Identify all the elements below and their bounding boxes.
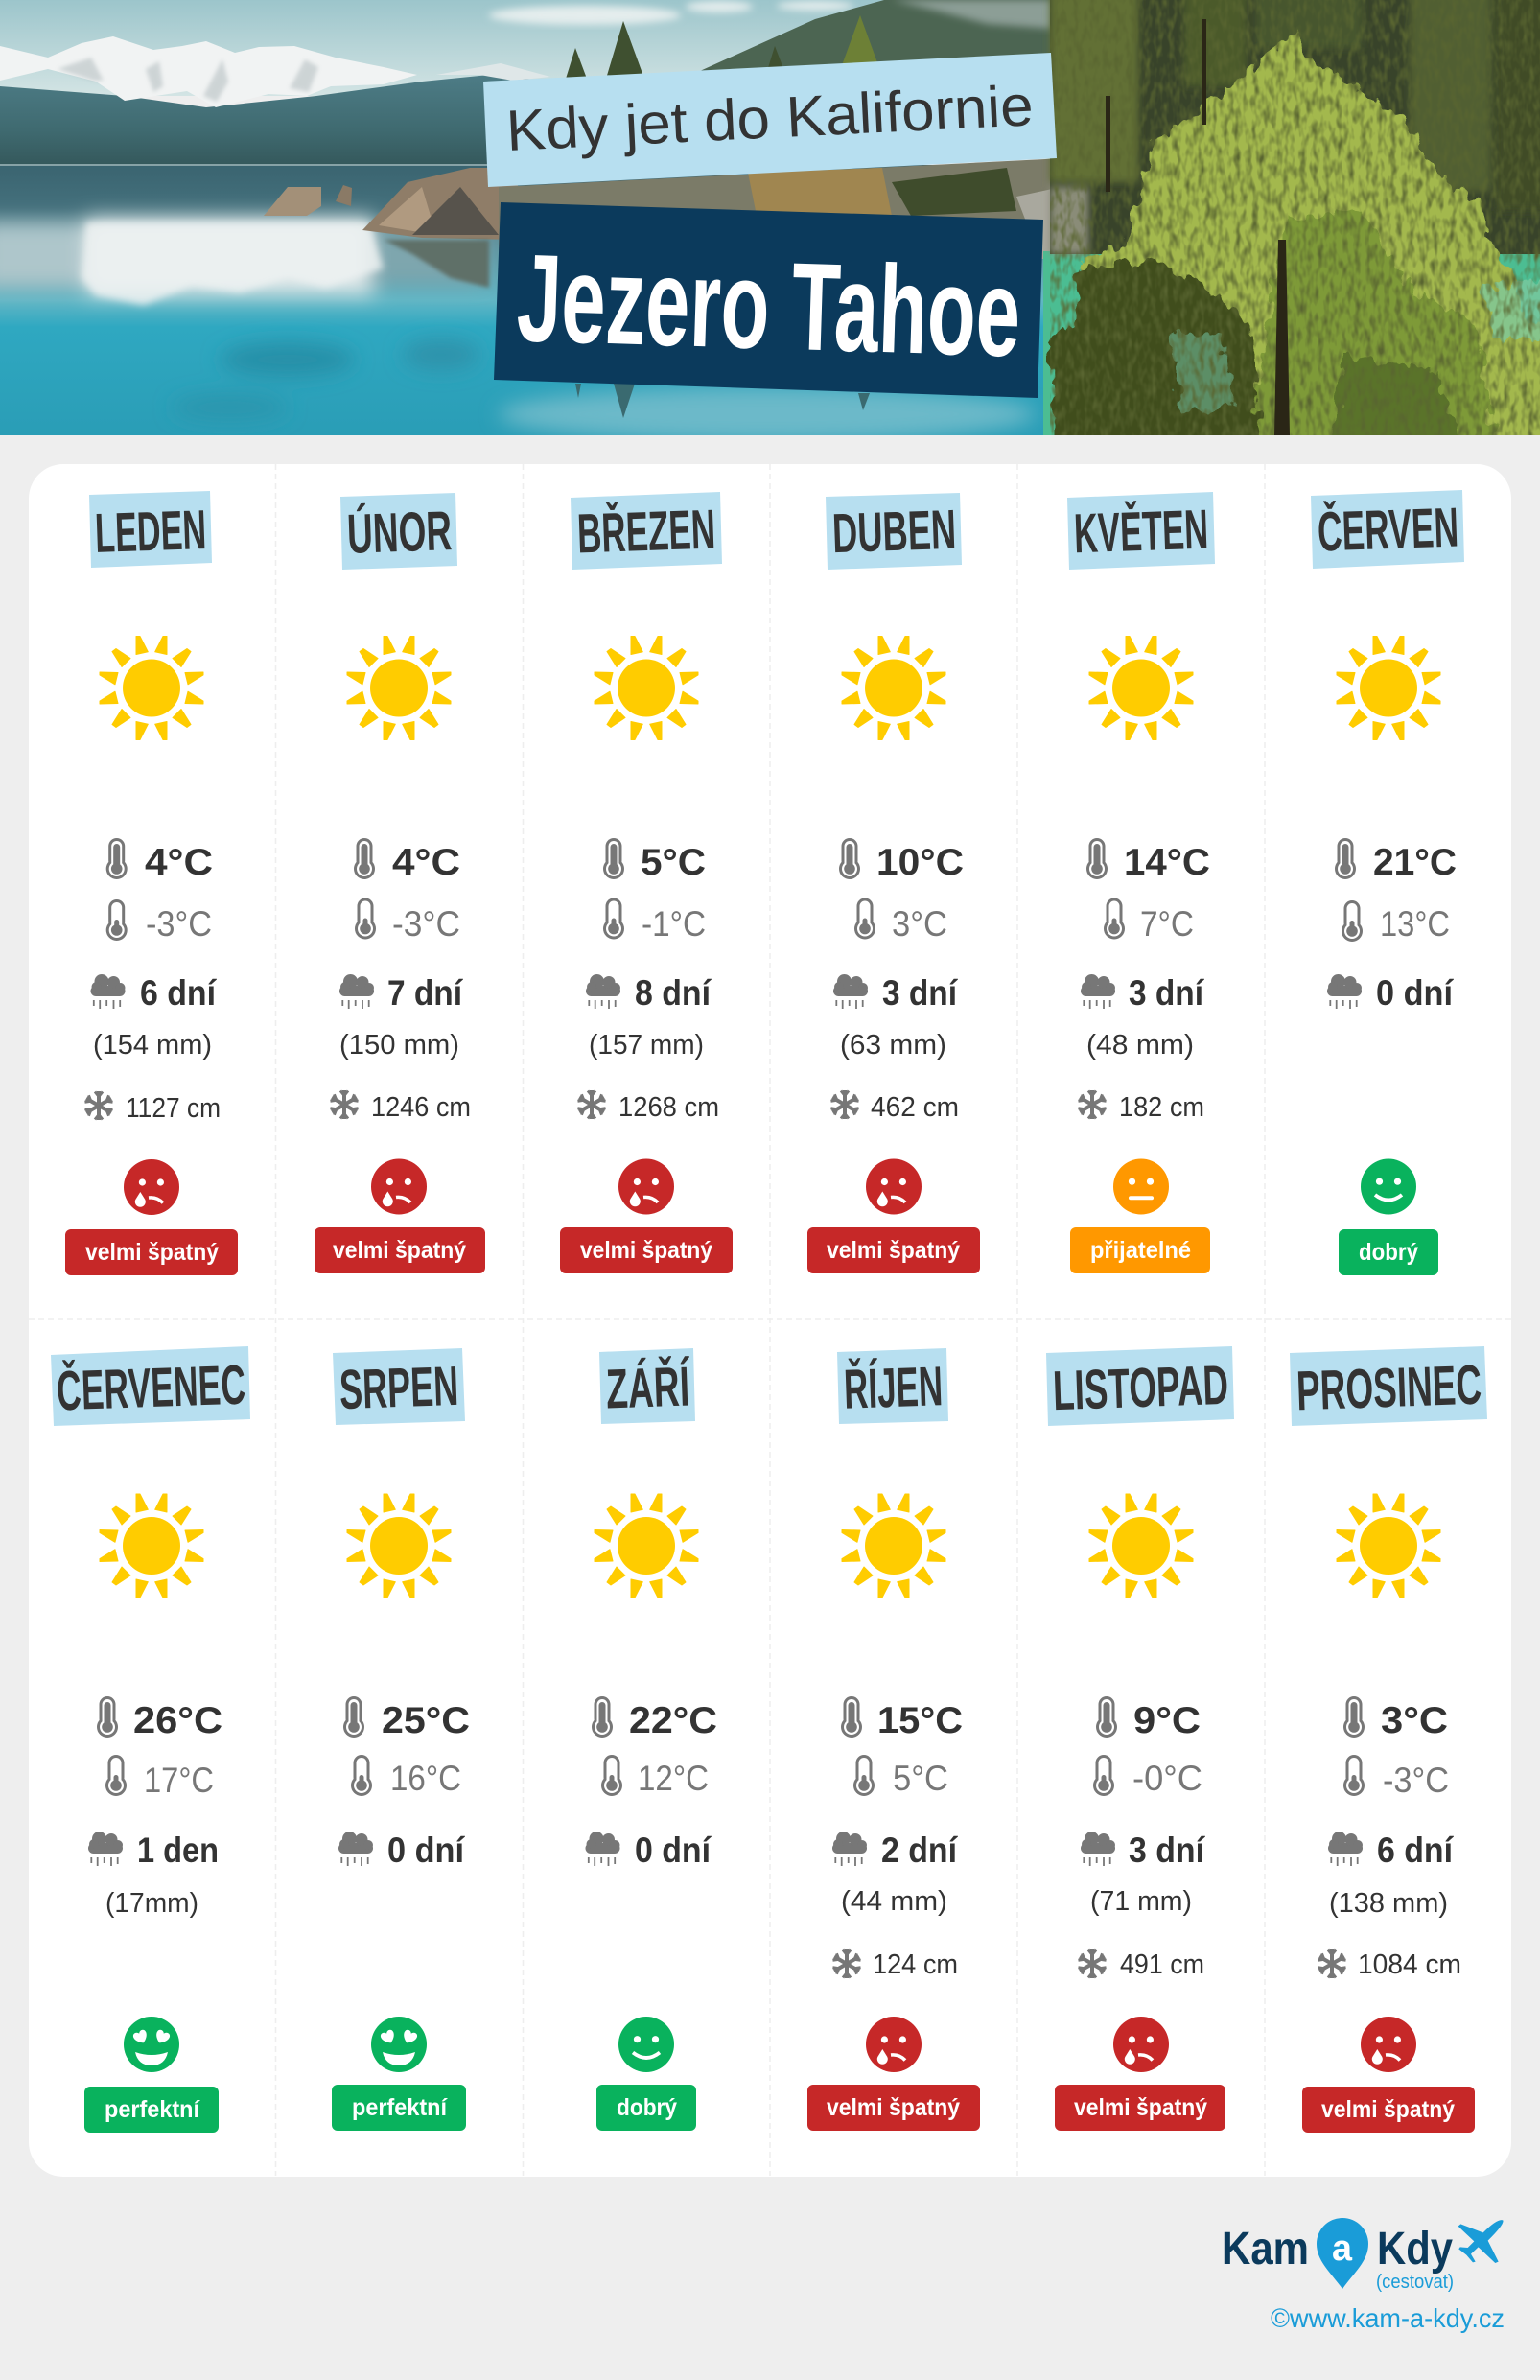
month label xyxy=(340,493,457,570)
icon: sun xyxy=(842,637,945,740)
rain days xyxy=(1081,973,1205,1013)
icon: sun xyxy=(347,1494,451,1598)
rainfall: (138 mm) xyxy=(1329,1888,1448,1919)
month: ČERVEN xyxy=(1311,490,1464,1275)
month label: LEDEN xyxy=(94,499,207,565)
month: SRPEN xyxy=(332,1348,470,2131)
snowfall xyxy=(1078,1949,1204,1980)
month label xyxy=(826,493,962,570)
shoreline strip xyxy=(0,164,489,166)
rating badge xyxy=(65,1229,238,1275)
min temperature xyxy=(603,898,706,944)
snowfall: 1084 cm xyxy=(1358,1949,1461,1980)
rain days: 0 dní xyxy=(635,1831,712,1870)
month label xyxy=(599,1348,695,1424)
snowfall: 462 cm xyxy=(871,1092,959,1123)
rating badge xyxy=(1302,2087,1475,2133)
snowfall xyxy=(330,1090,471,1123)
rain days xyxy=(88,1831,219,1870)
max temperature xyxy=(97,1696,222,1741)
icon: sun xyxy=(1089,1494,1193,1598)
month label: BŘEZEN xyxy=(576,499,716,565)
snowfall: 1127 cm xyxy=(126,1093,221,1124)
rating badge xyxy=(84,2087,219,2133)
min temperature: 5°C xyxy=(893,1759,948,1798)
rain days: 6 dní xyxy=(1377,1831,1455,1870)
icon: crying face xyxy=(618,1158,674,1214)
dark forested mountains xyxy=(0,75,529,164)
month: PROSINEC xyxy=(1290,1346,1487,2133)
icon: crying face xyxy=(1113,2017,1169,2072)
month label xyxy=(89,491,212,568)
min temperature xyxy=(105,1755,214,1800)
rating badge xyxy=(596,2085,696,2131)
snowfall xyxy=(84,1091,221,1124)
max temperature xyxy=(354,838,460,883)
icon: sun xyxy=(100,1494,203,1598)
min temperature xyxy=(854,898,947,944)
rainfall: (63 mm) xyxy=(840,1030,946,1061)
month label: ZÁŘÍ xyxy=(605,1355,691,1420)
month label: ŘÍJEN xyxy=(843,1355,944,1421)
min temperature: -0°C xyxy=(1132,1759,1202,1798)
rain days xyxy=(1327,973,1455,1013)
rating badge xyxy=(1070,1227,1210,1273)
rain days: 2 dní xyxy=(881,1831,959,1870)
foliage group xyxy=(1050,31,1540,451)
rating badge: velmi špatný xyxy=(85,1239,219,1266)
min temperature: 12°C xyxy=(638,1759,709,1798)
month label: SRPEN xyxy=(338,1355,459,1421)
rating badge: velmi špatný xyxy=(1321,2096,1455,2123)
month label xyxy=(571,492,722,570)
rain days: 1 den xyxy=(137,1831,219,1870)
max temperature: 4°C xyxy=(392,842,460,883)
lighter shallow water xyxy=(173,339,1036,441)
snowfall xyxy=(830,1090,959,1123)
rain days xyxy=(90,973,218,1013)
far right mountain xyxy=(701,0,1050,71)
rating badge: velmi špatný xyxy=(827,2094,960,2121)
min temperature xyxy=(106,899,212,944)
rating badge xyxy=(1055,2085,1225,2131)
rainfall: (71 mm) xyxy=(1090,1886,1192,1917)
min temperature xyxy=(853,1755,948,1798)
min temperature xyxy=(601,1755,709,1798)
logo word: Kdy: Kdy xyxy=(1377,2224,1453,2275)
min temperature xyxy=(355,898,460,944)
min temperature: -3°C xyxy=(1383,1761,1449,1800)
rainfall: (154 mm) xyxy=(93,1030,212,1061)
min temperature xyxy=(1342,900,1450,944)
month label xyxy=(1067,492,1215,570)
snowy peaks xyxy=(0,36,417,107)
rain days: 7 dní xyxy=(387,973,464,1013)
icon: map pin xyxy=(1317,2218,1368,2289)
max temperature xyxy=(106,838,213,883)
rain days: 0 dní xyxy=(387,1831,466,1870)
rain days: 3 dní xyxy=(1129,1831,1206,1870)
max temperature: 9°C xyxy=(1133,1700,1201,1741)
rating badge: přijatelné xyxy=(1090,1237,1191,1264)
rainfall: (44 mm) xyxy=(841,1886,947,1917)
emerald shallows xyxy=(1043,251,1540,435)
rain days: 6 dní xyxy=(140,973,218,1013)
min temperature: 16°C xyxy=(390,1759,461,1798)
max temperature xyxy=(1335,838,1457,883)
month label: LISTOPAD xyxy=(1052,1354,1229,1422)
max temperature xyxy=(841,1696,963,1741)
max temperature: 22°C xyxy=(629,1700,717,1741)
min temperature: 13°C xyxy=(1380,904,1450,944)
max temperature xyxy=(839,838,964,883)
max temperature: 4°C xyxy=(145,842,213,883)
icon: sun xyxy=(347,637,451,740)
min temperature: -3°C xyxy=(146,904,212,944)
icon: heart-eyes face xyxy=(124,2017,179,2072)
sky xyxy=(0,0,884,96)
month label: ČERVENEC xyxy=(56,1354,246,1422)
max temperature xyxy=(592,1696,717,1741)
website link: ©www.kam-a-kdy.cz xyxy=(1271,2303,1505,2333)
month: BŘEZEN xyxy=(560,492,733,1273)
icon: crying face xyxy=(1361,2017,1416,2072)
icon: map pin: a xyxy=(1332,2228,1353,2269)
icon: crying face xyxy=(124,1159,179,1215)
min temperature xyxy=(351,1755,461,1798)
rating badge: perfektní xyxy=(352,2094,448,2121)
max temperature: 25°C xyxy=(382,1700,470,1741)
title banner xyxy=(494,202,1043,398)
rating badge xyxy=(332,2085,466,2131)
rating badge: velmi špatný xyxy=(333,1237,466,1264)
rating badge: dobrý xyxy=(1359,1239,1418,1266)
rating badge: dobrý xyxy=(617,2094,677,2121)
month label: KVĚTEN xyxy=(1073,499,1209,565)
hero photo: lake with mountains and pines xyxy=(0,0,1540,451)
min temperature: 7°C xyxy=(1140,904,1194,944)
icon: sun xyxy=(595,1494,698,1598)
title text: Jezero Tahoe xyxy=(515,227,1022,383)
month: ÚNOR xyxy=(315,493,485,1273)
max temperature xyxy=(1096,1696,1201,1741)
snowfall xyxy=(577,1090,719,1123)
icon: heart-eyes face xyxy=(371,2017,427,2072)
icon: neutral face xyxy=(1113,1158,1169,1214)
icon: smiling face xyxy=(1361,1158,1416,1214)
icon: sun xyxy=(100,637,203,740)
month label xyxy=(837,1348,948,1424)
max temperature xyxy=(1086,838,1210,883)
max temperature xyxy=(343,1696,470,1741)
month label xyxy=(51,1346,250,1426)
white calendar card xyxy=(29,464,1511,2177)
rain days xyxy=(833,973,959,1013)
rainfall: (157 mm) xyxy=(589,1030,704,1061)
max temperature xyxy=(603,838,706,883)
rating badge xyxy=(315,1227,485,1273)
month label xyxy=(1046,1346,1234,1426)
snowfall: 1246 cm xyxy=(371,1092,471,1123)
month label xyxy=(1311,490,1464,569)
rating badge: perfektní xyxy=(105,2096,200,2123)
min temperature xyxy=(1343,1755,1449,1800)
max temperature: 14°C xyxy=(1124,842,1210,883)
needle texture xyxy=(1050,0,1540,435)
month: LEDEN xyxy=(65,491,238,1275)
min temperature xyxy=(1093,1755,1202,1798)
rain days xyxy=(586,973,712,1013)
rainfall: (48 mm) xyxy=(1086,1030,1194,1061)
rating badge: velmi špatný xyxy=(1074,2094,1207,2121)
rating badge xyxy=(807,2085,980,2131)
clouds xyxy=(489,1,853,25)
rain days xyxy=(832,1831,959,1870)
rain days xyxy=(1328,1831,1455,1870)
rating badge: velmi špatný xyxy=(580,1237,712,1264)
reflection streaks xyxy=(82,222,384,305)
snowfall: 491 cm xyxy=(1120,1949,1204,1980)
min temperature xyxy=(1104,898,1194,944)
rain days: 3 dní xyxy=(1129,973,1205,1013)
icon: sun xyxy=(595,637,698,740)
rain days xyxy=(585,1831,712,1870)
subtitle banner xyxy=(483,53,1057,187)
rating badge xyxy=(560,1227,733,1273)
max temperature: 21°C xyxy=(1373,842,1457,883)
min temperature: -1°C xyxy=(642,904,706,944)
rain days xyxy=(338,1831,466,1870)
month label: ÚNOR xyxy=(346,500,453,566)
month: LISTOPAD xyxy=(1046,1346,1234,2131)
logo tagline: (cestovat) xyxy=(1376,2272,1454,2293)
rain days xyxy=(1081,1831,1206,1870)
month: ČERVENEC xyxy=(51,1346,250,2133)
month label xyxy=(333,1348,465,1425)
mountain reflection xyxy=(0,217,484,295)
min temperature: 3°C xyxy=(892,904,947,944)
max temperature: 3°C xyxy=(1381,1700,1448,1741)
rain days: 8 dní xyxy=(635,973,712,1013)
snowfall xyxy=(1078,1090,1204,1123)
grid dividers xyxy=(29,464,1511,2176)
logo word: Kam: Kam xyxy=(1222,2224,1309,2275)
small conifers xyxy=(566,21,784,79)
icon: crying face xyxy=(371,1158,427,1214)
icon: sun xyxy=(1089,637,1193,740)
icon: smiling face xyxy=(618,2017,674,2072)
month label: DUBEN xyxy=(831,499,957,565)
subtitle text: Kdy jet do Kalifornie xyxy=(504,73,1035,163)
rating badge: velmi špatný xyxy=(827,1237,960,1264)
max temperature xyxy=(1343,1696,1448,1741)
snow ridge shadows xyxy=(58,58,318,102)
month: ŘÍJEN xyxy=(807,1348,980,2131)
rain days xyxy=(339,973,464,1013)
icon: sun xyxy=(1337,637,1440,740)
max temperature: 10°C xyxy=(876,842,964,883)
snowfall xyxy=(832,1949,958,1980)
snowfall: 182 cm xyxy=(1119,1092,1204,1123)
rating badge xyxy=(807,1227,980,1273)
icon: crying face xyxy=(866,2017,922,2072)
max temperature: 26°C xyxy=(133,1700,222,1741)
pine trunk xyxy=(1106,19,1290,435)
month: DUBEN xyxy=(807,493,980,1273)
shore rocks xyxy=(264,158,1103,288)
max temperature: 15°C xyxy=(877,1700,963,1741)
month: ZÁŘÍ xyxy=(585,1348,717,2131)
background forest xyxy=(1050,0,1540,254)
icon: airplane xyxy=(1458,2220,1504,2263)
rating badge xyxy=(1339,1229,1438,1275)
month: KVĚTEN xyxy=(1067,492,1215,1273)
max temperature: 5°C xyxy=(641,842,706,883)
green conifer xyxy=(842,15,878,65)
rain days: 0 dní xyxy=(1376,973,1455,1013)
rainfall: (150 mm) xyxy=(339,1030,459,1061)
lake water xyxy=(0,165,1151,435)
icon: sun xyxy=(1337,1494,1440,1598)
rainfall: (17mm) xyxy=(105,1888,198,1919)
min temperature: 17°C xyxy=(144,1761,214,1800)
icon: sun xyxy=(842,1494,945,1598)
icon: crying face xyxy=(866,1158,922,1214)
tree reflections xyxy=(575,384,870,418)
snowfall: 124 cm xyxy=(873,1949,958,1980)
min temperature: -3°C xyxy=(392,904,460,944)
snowfall: 1268 cm xyxy=(618,1092,719,1123)
rain days: 3 dní xyxy=(882,973,959,1013)
logo: Kam a Kdy xyxy=(1222,2218,1504,2293)
